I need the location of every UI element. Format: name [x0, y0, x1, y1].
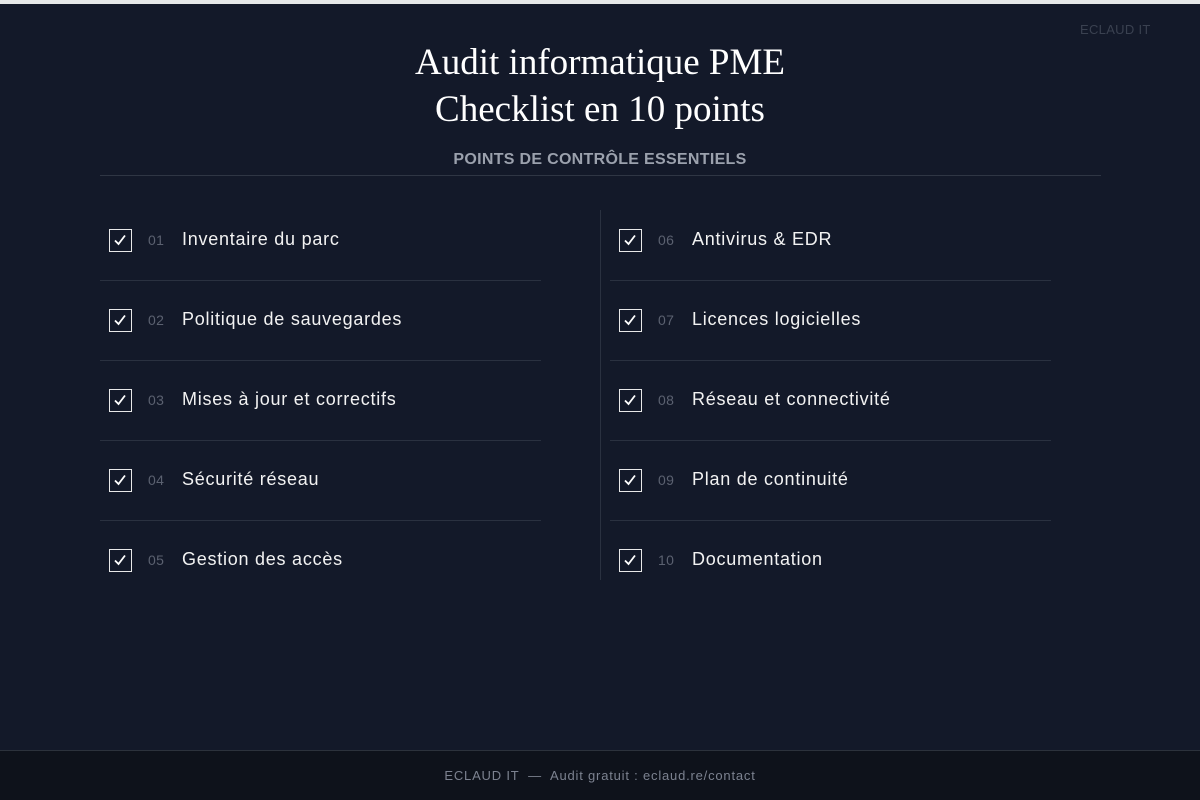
item 06: Antivirus & EDR — [692, 229, 832, 249]
item 03: Mises à jour et correctifs — [182, 389, 397, 409]
title — [415, 42, 785, 130]
footer: ECLAUD IT — Audit gratuit : eclaud.re/contact — [444, 768, 756, 783]
item 02: Politique de sauvegardes — [182, 309, 402, 329]
panel: right checklist — [610, 229, 1051, 572]
item 09: 09 — [658, 472, 674, 488]
item 08: 08 — [658, 392, 674, 408]
item 06: 06 — [658, 232, 674, 248]
item 05: Gestion des accès — [182, 549, 343, 569]
item 06 — [610, 201, 1051, 281]
item 03: 03 — [148, 392, 164, 408]
title: Audit informatique PME — [415, 42, 785, 83]
panel: left checklist — [100, 229, 541, 572]
item 01: Inventaire du parc — [182, 229, 340, 249]
item 08 — [610, 361, 1051, 441]
item 09: Plan de continuité — [692, 469, 849, 489]
subtitle: POINTS DE CONTRÔLE ESSENTIELS — [453, 151, 747, 168]
item 07: Licences logicielles — [692, 309, 861, 329]
item 04: 04 — [148, 472, 164, 488]
title: Checklist en 10 points — [435, 89, 765, 130]
item 05: 05 — [148, 552, 164, 568]
item 05 — [109, 549, 343, 572]
footer — [0, 750, 1200, 800]
item 04 — [100, 441, 541, 521]
item 01: 01 — [148, 232, 164, 248]
item 07: 07 — [658, 312, 674, 328]
item 10: Documentation — [692, 549, 823, 569]
item 03 — [100, 361, 541, 441]
item 10 — [619, 549, 823, 572]
item 01 — [100, 201, 541, 281]
item 02: 02 — [148, 312, 164, 328]
item 02 — [100, 281, 541, 361]
item 07 — [610, 281, 1051, 361]
item 10: 10 — [658, 552, 674, 568]
brand label: ECLAUD IT — [1080, 22, 1151, 37]
item 09 — [610, 441, 1051, 521]
item 08: Réseau et connectivité — [692, 389, 891, 409]
item 04: Sécurité réseau — [182, 469, 319, 489]
